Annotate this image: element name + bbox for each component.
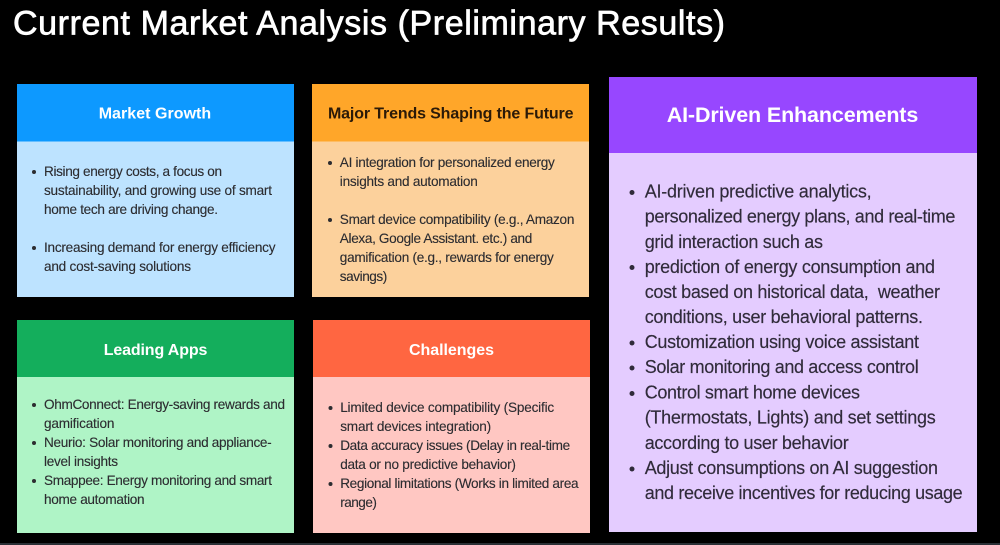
panel: Market Growth (17, 84, 294, 297)
text block: AI enhancements bullets (630, 182, 963, 503)
text block: challenges bullets: Limited device compatibility (Specific (340, 400, 554, 415)
text block: AI enhancements bullets: conditions, user behavioral patterns. (645, 307, 923, 327)
text block: major trends bullets: AI integration for personalized energy (340, 155, 555, 170)
text block: AI enhancements bullets: prediction of energy consumption and (645, 257, 935, 277)
text block: AI enhancements bullets: and receive incentives for reducing usage (645, 483, 963, 503)
text block: challenges bullets (328, 400, 579, 510)
text block: challenges bullets: Data accuracy issues (Delay in real-time (340, 438, 570, 453)
text block: leading apps bullets: OhmConnect: Energy-saving rewards and (44, 397, 285, 412)
heading: Major Trends Shaping the Future (312, 84, 589, 142)
panel: Leading Apps (17, 320, 294, 533)
text block: leading apps bullets: gamification (44, 416, 114, 431)
text block: major trends bullets: insights and automation (340, 174, 478, 189)
heading: Market Growth: Market Growth (99, 106, 211, 122)
text block: AI enhancements bullets: personalized energy plans, and real-time (645, 206, 955, 226)
text block: market growth bullets: Increasing demand for energy efficiency (44, 240, 276, 255)
text block: leading apps bullets: level insights (44, 454, 118, 469)
text block: AI enhancements bullets: grid interaction such as (645, 232, 823, 252)
heading: Major Trends Shaping the Future: Major Trends Shaping the Future (328, 106, 574, 122)
heading: AI-Driven Enhancements: AI-Driven Enhancements (667, 103, 918, 127)
heading: AI-Driven Enhancements (609, 77, 977, 153)
text block: major trends bullets (328, 155, 574, 284)
heading: Leading Apps: Leading Apps (104, 342, 207, 359)
text block: AI enhancements bullets: AI-driven predictive analytics, (645, 182, 872, 202)
text block: market growth bullets (32, 164, 276, 274)
text block: major trends bullets: gamification (e.g., rewards for energy (340, 250, 554, 265)
text block: leading apps bullets: Neurio: Solar monitoring and appliance- (44, 435, 272, 450)
heading: Challenges (313, 320, 590, 377)
text block: leading apps bullets (32, 397, 285, 507)
text block: AI enhancements bullets: cost based on historical data, weather (645, 282, 940, 302)
text block: AI enhancements bullets: Customization using voice assistant (645, 332, 919, 352)
text block: AI enhancements bullets: Solar monitoring and access control (645, 357, 919, 377)
panel: AI-Driven Enhancements (609, 77, 977, 532)
title: Current Market Analysis (Preliminary Results) (13, 4, 725, 42)
text block: market growth bullets: home tech are driving change. (44, 202, 218, 217)
heading: Market Growth (17, 84, 294, 142)
text block: challenges bullets: smart devices integration) (340, 419, 491, 434)
text block: challenges bullets: Regional limitations (Works in limited area (340, 476, 579, 491)
text block: leading apps bullets: home automation (44, 492, 145, 507)
text block: major trends bullets: Alexa, Google Assistant. etc.) and (340, 231, 532, 246)
text block: AI enhancements bullets: Adjust consumptions on AI suggestion (645, 458, 938, 478)
text block: challenges bullets: range) (340, 495, 377, 510)
text block: major trends bullets: Smart device compatibility (e.g., Amazon (340, 212, 574, 227)
text block: leading apps bullets: Smappee: Energy monitoring and smart (44, 473, 272, 488)
heading: Leading Apps (17, 320, 294, 377)
text block: major trends bullets: savings) (340, 269, 387, 284)
heading: Challenges: Challenges (409, 342, 494, 359)
text block: AI enhancements bullets: Control smart home devices (645, 382, 860, 402)
panel: Challenges (313, 320, 590, 533)
text block: AI enhancements bullets: according to user behavior (645, 433, 849, 453)
text block: market growth bullets: and cost-saving solutions (44, 259, 191, 274)
text block: market growth bullets: sustainability, and growing use of smart (44, 183, 272, 198)
text block: challenges bullets: data or no predictive behavior) (340, 457, 516, 472)
text block: AI enhancements bullets: (Thermostats, Lights) and set settings (645, 408, 936, 428)
text block: market growth bullets: Rising energy costs, a focus on (44, 164, 222, 179)
panel: Major Trends Shaping the Future (312, 84, 589, 297)
